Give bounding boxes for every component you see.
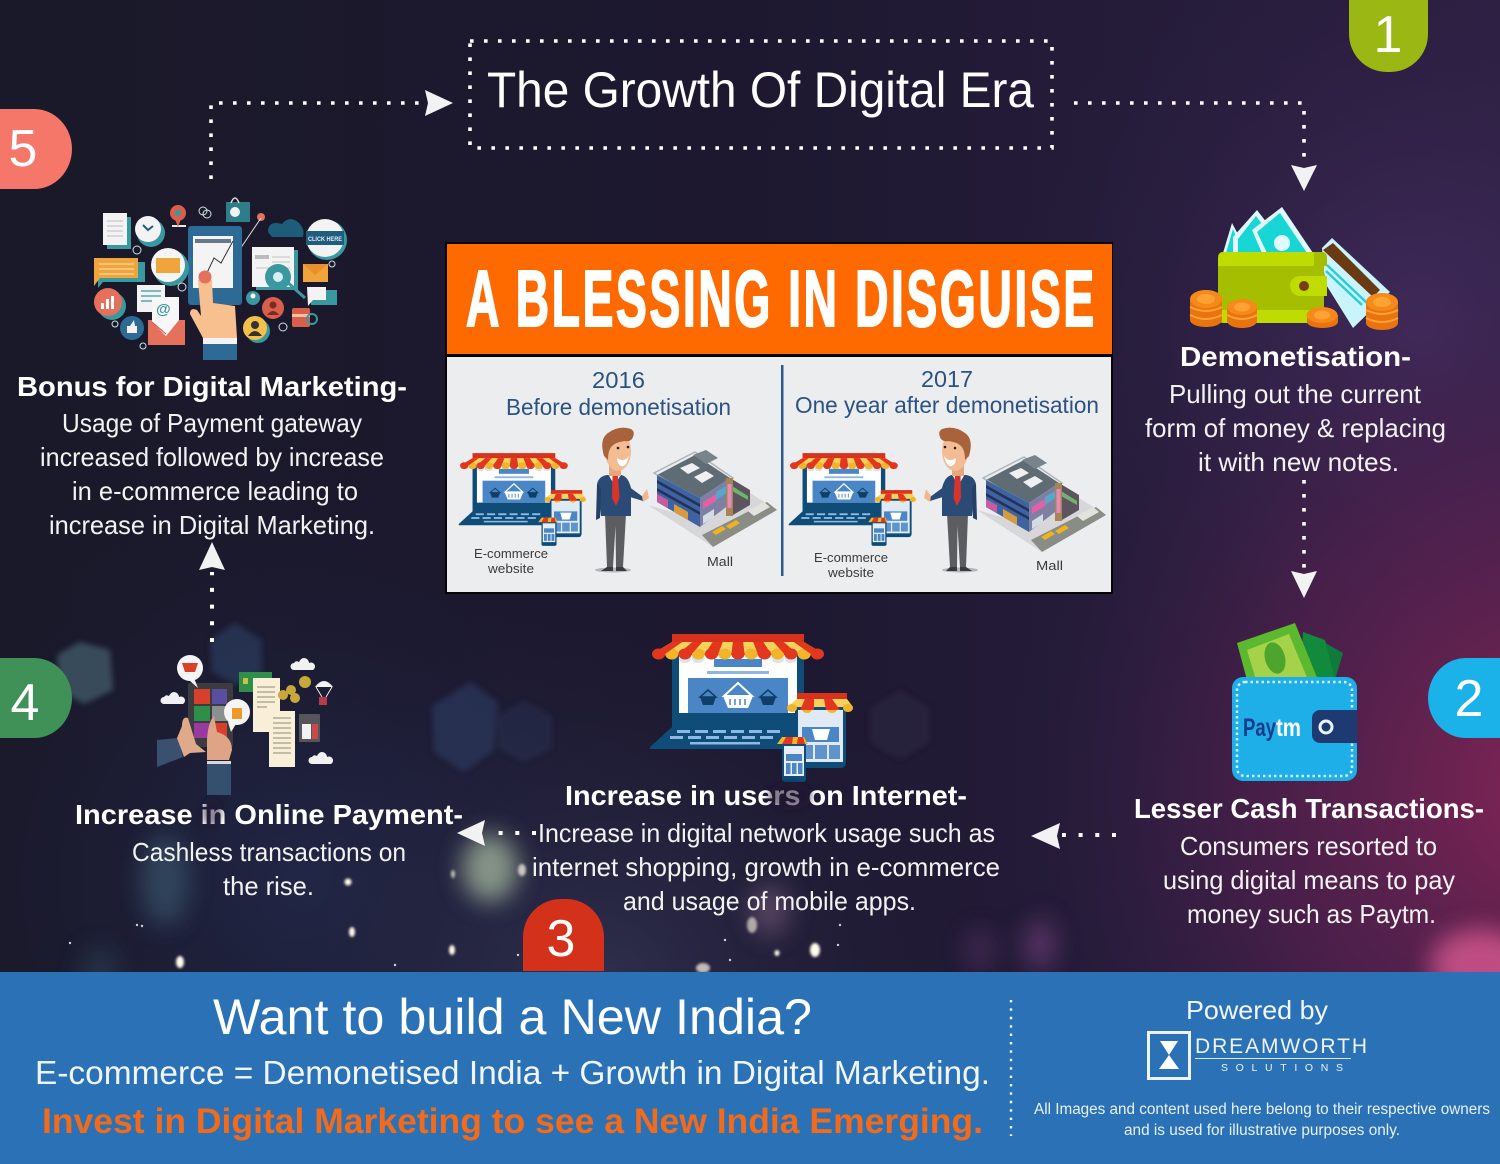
arrow: title to step 1	[1074, 103, 1317, 191]
icon: paytm wallet	[1232, 623, 1357, 781]
badge 5	[0, 109, 72, 189]
text: bonus for digital marketing: in e-commerce leading to	[72, 476, 358, 506]
badge 1	[1349, 0, 1428, 72]
text: demonetisation	[1145, 341, 1446, 477]
comparison area: One year after demonetisation	[795, 392, 1099, 418]
logo: dreamworth solutions	[1148, 1032, 1367, 1078]
text: bonus for digital marketing: increased followed by increase	[40, 442, 384, 472]
text: demonetisation: form of money & replacing	[1145, 413, 1446, 443]
badge 4: 4	[11, 674, 39, 732]
text: increase in users on internet: Increase in users on Internet-	[565, 780, 967, 811]
comparison area: E-commerce	[814, 551, 888, 565]
disclaimer: and is used for illustrative purposes only.	[1124, 1122, 1400, 1139]
disclaimer	[1034, 1101, 1490, 1139]
text: increase in online payment	[75, 799, 463, 901]
arrow: step 2 to step 3	[1031, 823, 1116, 849]
comparison area: Mall	[1036, 558, 1063, 573]
footer call to invest: Invest in Digital Marketing to see a New India Emerging.	[42, 1102, 983, 1141]
arrow: step 1 to step 2	[1291, 480, 1317, 598]
panel: a blessing in disguise	[445, 242, 1113, 594]
icon: online store on laptop, tablet and phone	[650, 634, 853, 782]
comparison area: Before demonetisation	[506, 394, 731, 420]
arrow: step 5 to title	[211, 90, 453, 179]
title with dotted frame: The Growth Of Digital Era	[487, 62, 1034, 118]
text: lesser cash transactions: using digital means to pay	[1163, 865, 1455, 895]
text: increase in users on internet: Increase in digital network usage such as	[538, 818, 995, 848]
text: increase in users on internet: and usage of mobile apps.	[623, 886, 916, 916]
logo: dreamworth solutions: SOLUTIONS	[1221, 1062, 1343, 1074]
comparison area: 2016	[592, 367, 645, 393]
badge 2: 2	[1455, 670, 1483, 728]
text: increase in online payment: the rise.	[223, 871, 314, 901]
icon: digital marketing cluster: @	[156, 301, 171, 318]
disclaimer: All Images and content used here belong to their respective owners	[1034, 1101, 1490, 1118]
text: increase in users on internet: internet shopping, growth in e-commerce	[532, 852, 1000, 882]
title with dotted frame	[470, 41, 1052, 148]
icon: paytm wallet: tm	[1276, 714, 1301, 742]
badge 5: 5	[9, 120, 37, 178]
text: demonetisation: it with new notes.	[1198, 447, 1399, 477]
arrow: step 4 to step 5	[199, 542, 225, 642]
text: lesser cash transactions	[1134, 793, 1484, 929]
text: lesser cash transactions: Lesser Cash Transactions-	[1134, 793, 1484, 824]
icon: online payment on tablet	[157, 655, 333, 795]
comparison area: website	[827, 566, 874, 580]
badge 3: 3	[547, 910, 575, 968]
text: increase in users on internet	[532, 780, 1000, 916]
arrow: step 3 to step 4	[457, 820, 536, 846]
text: demonetisation: Pulling out the current	[1169, 379, 1422, 409]
text: increase in online payment: Increase in Online Payment-	[75, 799, 463, 830]
comparison area	[447, 357, 1111, 592]
badge 3	[523, 899, 604, 971]
comparison area: 2017	[921, 366, 973, 392]
footer equation: E-commerce = Demonetised India + Growth in Digital Marketing.	[35, 1054, 990, 1091]
logo: dreamworth solutions: DREAMWORTH	[1195, 1035, 1367, 1058]
shadows cast across the headings	[202, 782, 812, 826]
icon: paytm wallet: Pay	[1243, 714, 1276, 742]
comparison area: website	[487, 562, 534, 576]
icon: wallet with cash and card	[1190, 207, 1398, 330]
panel: footer call to action	[0, 972, 1500, 1164]
text: bonus for digital marketing: Bonus for Digital Marketing-	[17, 371, 407, 402]
text: bonus for digital marketing	[17, 371, 407, 540]
powered by: Powered by	[1186, 995, 1328, 1025]
footer headline: Want to build a New India?	[213, 989, 812, 1045]
comparison area: E-commerce	[474, 547, 548, 561]
comparison area: Mall	[707, 554, 733, 569]
text: lesser cash transactions: Consumers resorted to	[1180, 831, 1437, 861]
badge 2	[1428, 658, 1500, 738]
banner heading: A BLESSING IN DISGUISE	[466, 254, 1094, 343]
badge 4	[0, 658, 72, 738]
text: increase in online payment: Cashless transactions on	[132, 837, 406, 867]
text: bonus for digital marketing: Usage of Payment gateway	[62, 408, 362, 438]
text: demonetisation: Demonetisation-	[1180, 341, 1411, 372]
icon: digital marketing cluster	[94, 198, 347, 360]
icon: digital marketing cluster: CLICK HERE	[308, 237, 342, 243]
text: lesser cash transactions: money such as Paytm.	[1187, 899, 1436, 929]
badge 1: 1	[1374, 6, 1402, 64]
coin stacks	[1190, 290, 1398, 330]
text: bonus for digital marketing: increase in Digital Marketing.	[49, 510, 375, 540]
